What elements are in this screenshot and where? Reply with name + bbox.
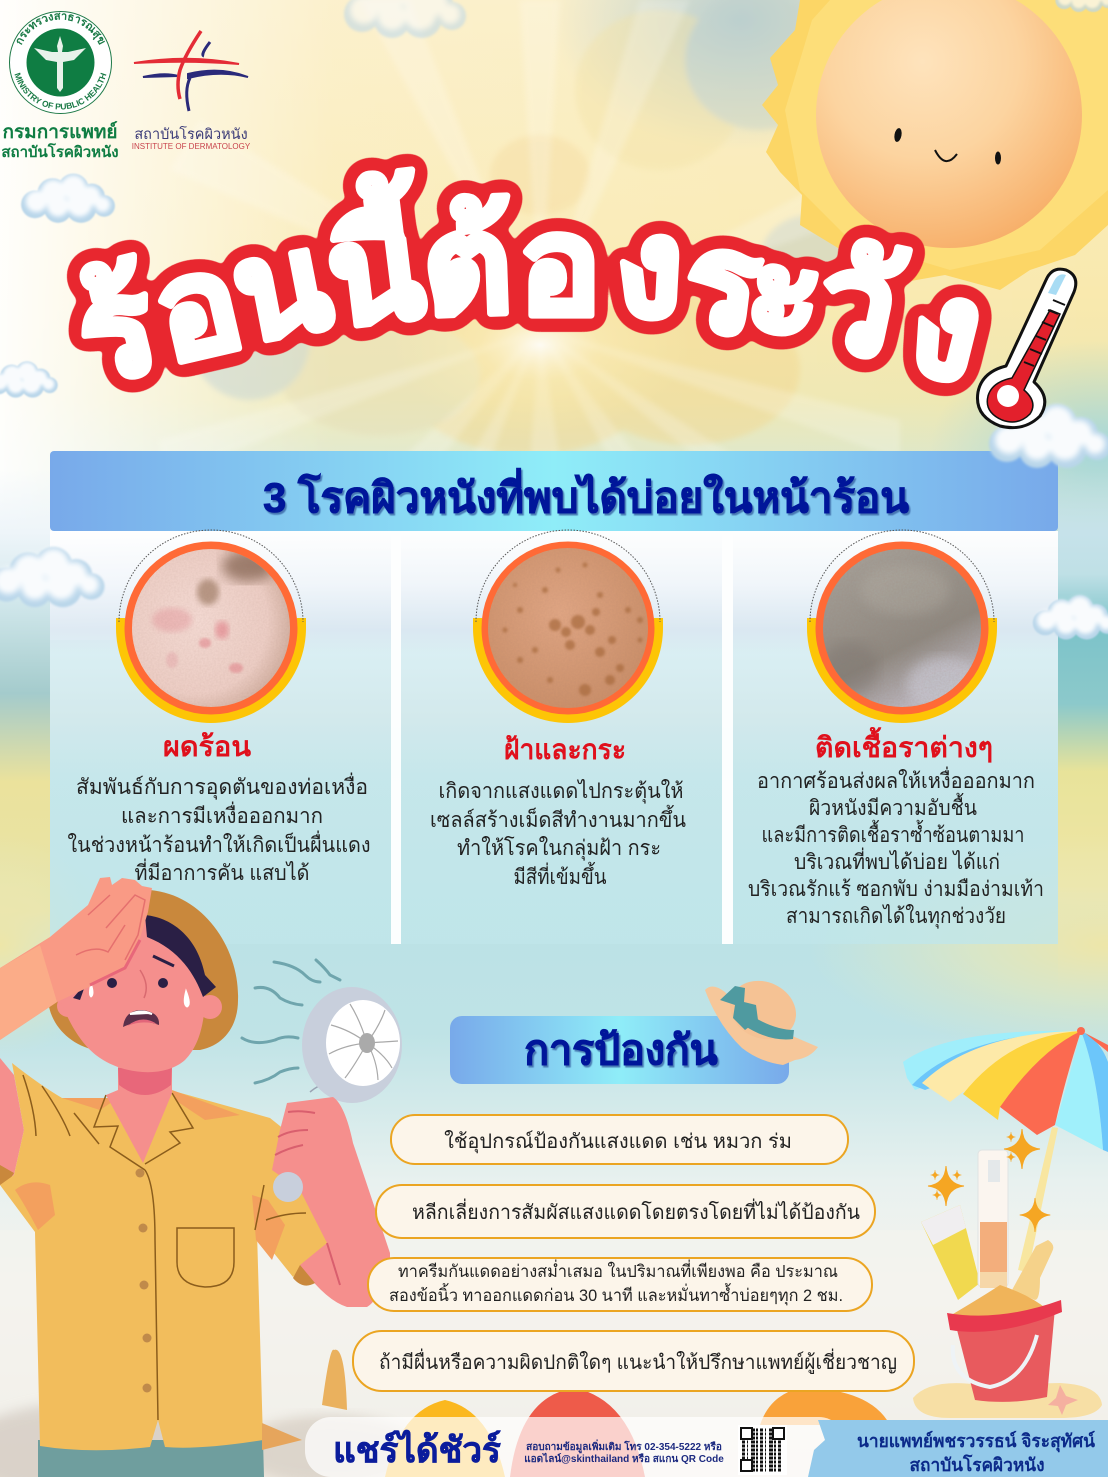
title: ง (896, 248, 997, 411)
QR code (738, 1425, 787, 1475)
panel: melasma and freckles (401, 530, 722, 884)
bottle (978, 1150, 1008, 1288)
description: melasma (430, 779, 686, 889)
logo: Ministry of Public Health: MINISTRY OF PUBLIC HEALTH (14, 72, 106, 110)
panel: heat rash (50, 530, 391, 944)
logo: Ministry of Public Health: สถาบันโรคผิวหนัง (1, 142, 119, 161)
tube (921, 1205, 980, 1300)
shirt (0, 1063, 330, 1450)
description: fungal infection: สามารถเกิดได้ในทุกช่วงวัย (786, 904, 1006, 929)
description: heat rash: ที่มีอาการคัน แสบได้ (134, 858, 310, 885)
illustration: beach umbrella (903, 1027, 1108, 1272)
sweat patches (15, 1090, 285, 1260)
title: น (221, 203, 341, 370)
heading: fungal infection: ติดเชื้อราต่างๆ (815, 726, 993, 763)
icon: thermometer (977, 269, 1076, 428)
starfish (1048, 1385, 1078, 1415)
prevention item 2 (376, 1185, 875, 1238)
description: melasma: เซลล์สร้างเม็ดสีทำงานมากขึ้น (430, 805, 686, 832)
heading: melasma: ฝ้าและกระ (504, 734, 626, 765)
description: fungal infection: และมีการติดเชื้อราซ้ำซ้อนตามมา (762, 820, 1024, 847)
illustration: smiling sun (762, 0, 1108, 290)
panel: prevention heading: การป้องกัน (524, 1027, 718, 1073)
sun rays (160, 0, 900, 480)
pale background clouds (190, 0, 860, 455)
illustration: sunscreen products in bucket (913, 1129, 1102, 1418)
description: melasma: ทำให้โรคในกลุ่มฝ้า กระ (457, 836, 661, 861)
prevention item 3 (368, 1258, 872, 1311)
heading: heat rash: ผดร้อน (163, 731, 251, 762)
footer credit (808, 1420, 1108, 1477)
footer credit: สถาบันโรคผิวหนัง (910, 1454, 1044, 1475)
title: อ (519, 190, 601, 342)
title: ะ (737, 208, 835, 370)
decoration: shells and starfish (262, 1350, 890, 1477)
description: fungal infection: อากาศร้อนส่งผลให้เหงื่อออกมาก (757, 766, 1035, 793)
logo: Ministry of Public Health: กรมการแพทย์ (2, 121, 118, 143)
description: heat rash: ในช่วงหน้าร้อนทำให้เกิดเป็นผื่นแดง (68, 830, 370, 857)
logo: Ministry of Public Health: กระทรวงสาธารณสุข (16, 12, 105, 45)
logo: Ministry of Public Health (1, 11, 119, 161)
bucket (955, 1308, 1055, 1402)
logo: Institute of Dermatology: สถาบันโรคผิวหนัง (134, 125, 248, 143)
prevention item 3: ทาครีมกันแดดอย่างสม่ำเสมอ ในปริมาณที่เพียงพอ คือ ประมาณ (398, 1259, 838, 1281)
wind lines (242, 960, 340, 1083)
description: fungal infection: ผิวหนังมีความอับชื้น (809, 793, 977, 820)
photo: melasma (473, 530, 663, 723)
title: นี้ (317, 168, 434, 354)
collar and shirt lines (23, 1075, 306, 1420)
hat (48, 890, 238, 1050)
logo: Institute of Dermatology: INSTITUTE OF DERMATOLOGY (132, 142, 251, 151)
prevention item 1: ใช้อุปกรณ์ป้องกันแสงแดด เช่น หมวก ร่ม (444, 1130, 792, 1154)
description: fungal infection (748, 766, 1044, 929)
sparkles (928, 1166, 964, 1206)
title: วั (805, 222, 913, 387)
prevention item 1 (391, 1115, 848, 1164)
sand (953, 1285, 1048, 1322)
fan knob (273, 1172, 303, 1202)
illustration: hot man with fan (0, 877, 402, 1477)
fan (302, 987, 402, 1103)
title: ร (677, 203, 768, 363)
right arm and hand (272, 1097, 390, 1307)
title: ต้ (421, 188, 514, 343)
contact text (524, 1439, 724, 1465)
sun glow (390, 255, 690, 435)
prevention item 2: หลีกเลี่ยงการสัมผัสแสงแดดโดยตรงโดยที่ไม่ได้ป้องกัน (412, 1198, 860, 1224)
description: heat rash: สัมพันธ์กับการอุดตันของท่อเหงื่อ (76, 772, 368, 800)
panel: fungal infection (733, 530, 1058, 944)
title (63, 168, 997, 412)
description: fungal infection: บริเวณรักแร้ ซอกพับ ง่ามมือง่ามเท้า (748, 878, 1044, 901)
scoop (1012, 1240, 1053, 1300)
description: melasma: มีสีที่เข้มขึ้น (514, 862, 606, 889)
left arm (0, 1058, 24, 1185)
prevention item 4 (353, 1331, 914, 1391)
buttons (136, 1168, 152, 1392)
pants (38, 1440, 264, 1477)
photo: heat rash (116, 530, 306, 723)
description: heat rash (68, 772, 370, 885)
title: อ (141, 224, 254, 390)
logo: Institute of Dermatology (132, 31, 251, 151)
title: ง (612, 190, 687, 346)
prevention item 4: ถ้ามีผื่นหรือความผิดปกติใดๆ แนะนำให้ปรึกษาแพทย์ผู้เชี่ยวชาญ (379, 1348, 897, 1375)
description: heat rash: และการมีเหงื่อออกมาก (121, 801, 323, 828)
hair (145, 915, 216, 997)
contact text: แอดไลน์@skinthailand หรือ สแกน QR Code (524, 1452, 724, 1465)
icon: straw hat with ribbon (705, 970, 818, 1065)
panel: prevention heading (450, 1016, 789, 1084)
footer band (305, 1417, 845, 1477)
neck (106, 1065, 172, 1163)
column gutters (391, 531, 733, 944)
clouds (0, 0, 1108, 639)
description: fungal infection: บริเวณที่พบได้บ่อย ได้แก่ (794, 847, 1000, 874)
contact text: สอบถามข้อมูลเพิ่มเติม โทร 02-354-5222 หรือ (526, 1439, 722, 1454)
heading: 3 common summer skin diseases: 3 โรคผิวหนังที่พบได้บ่อยในหน้าร้อน (263, 468, 909, 521)
eyes, brow and nose (107, 978, 117, 988)
raised forearm and hand (0, 877, 152, 1040)
prevention item 3: สองข้อนิ้ว ทาออกแดดก่อน 30 นาที และหมั่นทาซ้ำบ่อยๆทุก 2 ชม. (389, 1283, 843, 1306)
title: ร้ (63, 247, 170, 412)
description: melasma: เกิดจากแสงแดดไปกระตุ้นให้ (438, 779, 684, 804)
footer credit: นายแพทย์พชรวรรธน์ จิระสุทัศน์ (857, 1430, 1096, 1453)
photo: fungal infection (807, 530, 997, 723)
footer slogan: แชร์ได้ชัวร์ (333, 1429, 501, 1470)
sweat drops (90, 983, 189, 1007)
mouth (123, 1010, 159, 1027)
panel: disease header (50, 451, 1058, 531)
ears and face (57, 995, 222, 1019)
